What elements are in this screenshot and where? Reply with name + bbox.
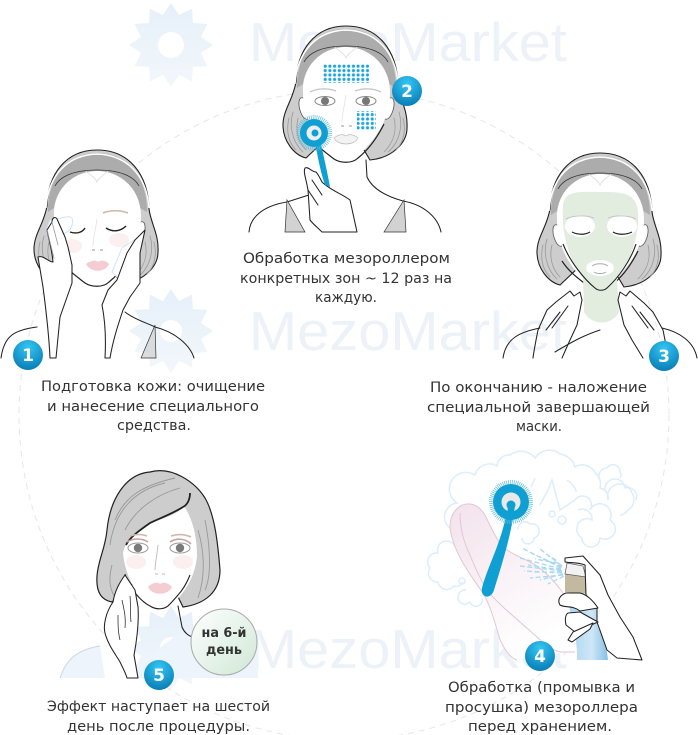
spray — [520, 548, 564, 584]
badge 1: 1 — [22, 346, 34, 366]
step 1 caption — [41, 379, 265, 434]
step 2 caption: каждую. — [315, 290, 377, 306]
step 3 caption: маски. — [516, 419, 562, 435]
neck — [178, 606, 193, 637]
bubble: на 6-й — [202, 625, 246, 641]
roller head — [491, 482, 531, 522]
badge 1 — [13, 340, 43, 370]
watermark: star bottom — [129, 606, 213, 690]
step 1 illustration — [1, 150, 194, 370]
tank straps — [285, 200, 406, 232]
watermark text top: MezoMarket — [249, 11, 567, 73]
step 3 caption: По окончанию - наложение — [430, 380, 647, 396]
hand left — [533, 291, 582, 358]
step 1 caption: и нанесение специального — [47, 399, 259, 415]
jawline — [563, 244, 636, 290]
badge 2: 2 — [401, 82, 413, 102]
cotton pads — [47, 217, 136, 280]
step 3 caption: специальной завершающей — [427, 400, 650, 416]
hair — [97, 471, 220, 607]
step 5 illustration — [60, 471, 258, 690]
hand — [304, 168, 357, 232]
body — [503, 328, 697, 358]
badge 5: 5 — [153, 666, 165, 686]
body — [1, 312, 194, 358]
dots forehead — [323, 64, 370, 83]
step 2 illustration — [249, 26, 441, 232]
nose — [155, 545, 165, 574]
foam clouds — [428, 450, 637, 606]
eye cutouts — [565, 215, 637, 276]
blouse — [60, 630, 258, 678]
step 3 illustration — [503, 153, 697, 371]
pink inner line — [460, 513, 575, 652]
badge 3: 3 — [658, 347, 670, 367]
lips — [334, 135, 358, 144]
badge 5 — [144, 660, 174, 690]
hand right — [618, 291, 668, 358]
roller head — [298, 117, 330, 149]
badge 4 — [525, 641, 555, 671]
eyes open — [310, 89, 381, 106]
badge 4: 4 — [534, 647, 546, 667]
pink roller shape — [450, 504, 575, 660]
step 5 caption — [47, 699, 270, 735]
green mask — [563, 192, 638, 322]
step 4 caption — [445, 680, 638, 735]
hand right — [102, 230, 145, 358]
lips — [148, 583, 172, 594]
dots cheek — [357, 111, 376, 130]
step 3 caption — [427, 380, 650, 435]
roller handle — [482, 505, 515, 597]
lips — [86, 261, 109, 271]
step 4 illustration — [428, 450, 642, 671]
step 1 caption: средства. — [117, 418, 191, 434]
step 2 caption: Обработка мезороллером — [243, 251, 450, 267]
hair strands — [110, 478, 210, 598]
step 2 caption: конкретных зон ~ 12 раз на — [240, 271, 452, 287]
step 1 caption: Подготовка кожи: очищение — [41, 379, 265, 395]
step 2 caption — [240, 251, 452, 306]
fringe line — [126, 493, 190, 545]
tank strap — [141, 325, 156, 358]
body — [249, 160, 441, 232]
bubble: день — [206, 642, 242, 658]
watermark text bottom: MezoMarket — [249, 618, 567, 680]
eyes — [127, 534, 191, 553]
brows — [103, 211, 128, 213]
step 4 caption: просушка) мезороллера — [445, 700, 638, 716]
step 4 caption: перед хранением. — [468, 719, 612, 735]
blush — [126, 555, 146, 569]
watermark: star middle — [129, 289, 213, 373]
closed eyes — [70, 226, 126, 233]
watermark: star top — [129, 3, 213, 87]
hand — [104, 575, 138, 678]
step 5 caption: Эффект наступает на шестой — [47, 699, 270, 715]
step 4 caption: Обработка (промывка и — [448, 680, 635, 696]
roller handle — [314, 133, 330, 187]
face — [123, 506, 197, 609]
bubble — [191, 609, 257, 675]
badge 2 — [392, 76, 422, 106]
hand left — [38, 218, 72, 358]
bottle — [567, 594, 608, 660]
watermark text middle: MezoMarket — [249, 300, 567, 362]
blush — [62, 239, 82, 253]
badge 3 — [649, 341, 679, 371]
step 5 caption: день после процедуры. — [67, 719, 250, 735]
hand on bottle — [559, 556, 642, 660]
